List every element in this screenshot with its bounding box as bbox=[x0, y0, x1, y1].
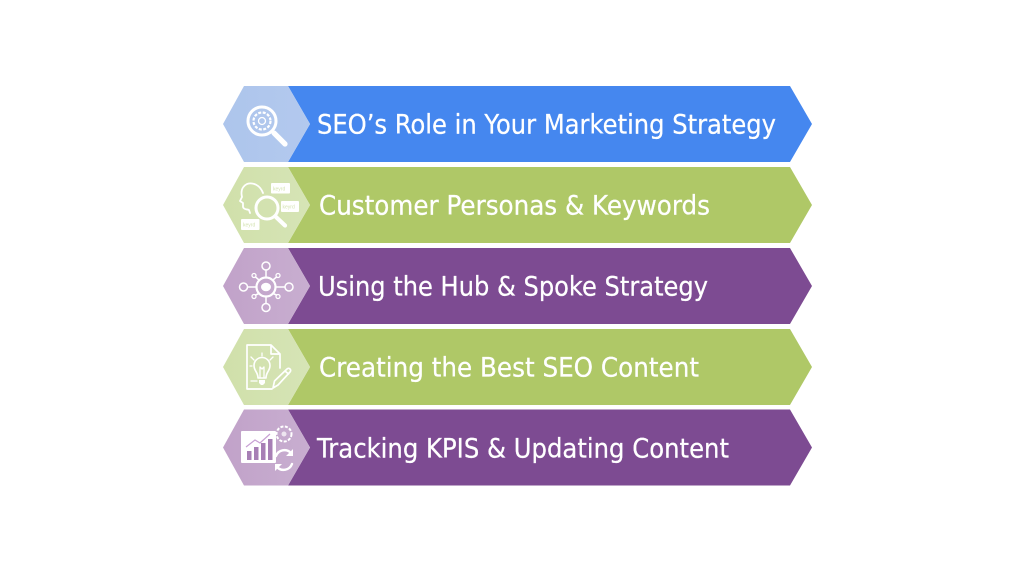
heading: hub and spoke: Using the Hub & Spoke Strategy bbox=[318, 272, 708, 302]
heading: best SEO content: Creating the Best SEO Content bbox=[319, 352, 699, 384]
icon: head, magnifier and keyword tags: keyrd bbox=[243, 222, 255, 228]
icon: magnifier with gear bbox=[248, 107, 285, 144]
icon: head, magnifier and keyword tags: keyrd bbox=[282, 204, 295, 210]
icon: head, magnifier and keyword tags bbox=[240, 183, 299, 230]
icon: hub and spokes bbox=[240, 262, 293, 312]
light green hexagon bbox=[223, 167, 310, 243]
green arrow bar bbox=[288, 167, 812, 243]
blue arrow bar bbox=[288, 86, 812, 162]
panel: hub and spoke strategy bbox=[223, 248, 812, 324]
panel: customer personas and keywords bbox=[223, 167, 812, 243]
heading: customer personas: Customer Personas & Keywords bbox=[319, 190, 710, 222]
panel: SEO's role in your marketing strategy bbox=[223, 86, 812, 162]
light purple hexagon bbox=[223, 410, 310, 486]
icon: document with light bulb and pencil bbox=[247, 345, 291, 389]
purple arrow bar bbox=[288, 410, 812, 486]
light green hexagon bbox=[223, 329, 310, 405]
green arrow bar bbox=[288, 329, 812, 405]
light purple hexagon bbox=[223, 248, 310, 324]
purple arrow bar bbox=[288, 248, 812, 324]
panel: tracking KPIs and updating content bbox=[223, 410, 812, 486]
panel: creating the best SEO content bbox=[223, 329, 812, 405]
icon: head, magnifier and keyword tags: keyrd bbox=[273, 186, 285, 192]
light blue hexagon bbox=[223, 86, 310, 162]
icon: chart, gear and refresh arrows bbox=[241, 426, 293, 471]
heading: tracking KPIs: Tracking KPIS & Updating Content bbox=[316, 434, 729, 464]
heading: SEO's role: SEO’s Role in Your Marketing Strategy bbox=[317, 110, 776, 140]
